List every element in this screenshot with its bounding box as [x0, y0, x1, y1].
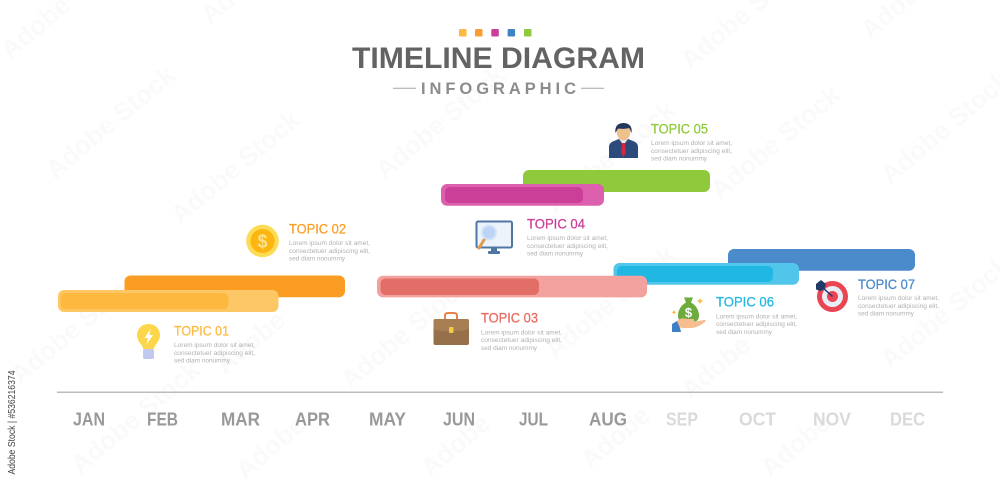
text: Adobe Stock — [540, 94, 681, 220]
topic 07 body: Lorem ipsum dolor sit amet, — [858, 295, 939, 302]
month labels: AUG — [589, 410, 627, 430]
topic 02 body: consectetuer adipiscing elit, — [289, 248, 370, 255]
month labels: FEB — [147, 410, 178, 430]
icon: dollar coin: $ — [257, 232, 268, 252]
topic 04 body: sed diam nonummy — [527, 250, 584, 258]
timeline axis — [57, 392, 943, 430]
month labels: NOV — [813, 410, 851, 430]
bar: topic 02 — [124, 276, 345, 297]
topic 07 body: sed diam nonummy — [858, 310, 915, 318]
month labels: JUN — [443, 410, 475, 430]
topic 03 heading: TOPIC 03 — [481, 310, 538, 326]
icon: businessman — [609, 123, 638, 158]
text: Adobe Stock — [705, 79, 846, 205]
text: Adobe — [755, 408, 836, 483]
text: Adobe — [415, 408, 496, 483]
text: Adobe Stock — [165, 104, 306, 230]
icon: dollar coin — [246, 225, 279, 257]
icon: dartboard — [816, 280, 848, 312]
topic 06 body: Lorem ipsum dolor sit amet, — [716, 314, 797, 320]
title block — [352, 29, 645, 98]
topic 06 body: sed diam nonummy — [716, 329, 773, 336]
topic 06 body: consectetuer adipiscing elit, — [716, 321, 797, 328]
text: Adobe Stock — [65, 354, 206, 480]
text: Adobe Stock — [540, 239, 681, 365]
month labels: DEC — [890, 410, 925, 430]
panel: topic 02 — [124, 220, 370, 297]
panel: topic 06 — [614, 263, 799, 336]
subheading: INFOGRAPHIC — [421, 80, 576, 98]
text: Adobe — [575, 400, 656, 475]
panel: topic 03 — [377, 276, 647, 352]
topic 03 body — [481, 330, 562, 352]
topic 07 heading: TOPIC 07 — [858, 276, 915, 292]
panel: topic 04 — [441, 184, 608, 258]
month labels: JAN — [73, 410, 105, 430]
topic 01 body: sed diam nonummy — [174, 358, 231, 364]
month labels — [73, 410, 925, 430]
text: Adobe — [210, 305, 291, 380]
heading: TIMELINE DIAGRAM — [352, 42, 645, 75]
topic 06 body — [716, 314, 797, 336]
topic 06 heading: TOPIC 06 — [716, 294, 774, 310]
icon: light bulb — [137, 324, 160, 359]
topic 04 body: Lorem ipsum dolor sit amet, — [527, 235, 608, 242]
month labels: MAR — [221, 410, 260, 430]
topic 05 body: Lorem ipsum dolor sit amet, — [651, 140, 732, 147]
topic 02 body: Lorem ipsum dolor sit amet, — [289, 240, 370, 247]
topic 02 body: sed diam nonummy — [289, 256, 346, 262]
panel: topic 07 — [728, 249, 939, 318]
topic 04 body — [527, 235, 608, 258]
color squares — [459, 29, 532, 36]
topic 03 body: Lorem ipsum dolor sit amet, — [481, 330, 562, 336]
bar: topic 04 — [441, 184, 604, 206]
icon: money bag on hand: $ — [685, 305, 693, 320]
text: Adobe Stock — [370, 59, 511, 185]
topic 05 heading: TOPIC 05 — [651, 120, 708, 136]
topic 02 body — [289, 240, 370, 262]
topic 02 heading: TOPIC 02 — [289, 220, 346, 236]
text: Adobe — [675, 330, 756, 405]
panel: topic 05 — [523, 120, 732, 192]
stock image credit: Adobe Stock | #536216374 — [6, 370, 18, 474]
icon: briefcase — [434, 313, 469, 345]
panel: topic 01 — [58, 290, 278, 364]
topic 04 body: consectetuer adipiscing elit, — [527, 243, 608, 250]
topic 03 body: consectetuer adipiscing elit, — [481, 337, 562, 344]
bar: topic 03 — [377, 276, 647, 297]
topic 04 heading: TOPIC 04 — [527, 215, 585, 231]
topic 03 body: sed diam nonummy — [481, 345, 538, 352]
topic 07 body: consectetuer adipiscing elit, — [858, 303, 939, 310]
month labels: JUL — [519, 410, 548, 430]
topic 05 body: consectetuer adipiscing elit, — [651, 148, 732, 155]
topic 01 heading: TOPIC 01 — [174, 322, 229, 338]
month labels: SEP — [666, 410, 698, 430]
month labels: MAY — [369, 410, 406, 430]
topic 07 body — [858, 295, 939, 318]
topic 05 body — [651, 140, 732, 162]
topic 01 body: Lorem ipsum dolor sit amet, — [174, 342, 255, 349]
month labels: OCT — [739, 410, 776, 430]
text: Adobe Stock — [5, 264, 146, 390]
bar: topic 07 — [728, 249, 915, 271]
text: Adobe Stock — [40, 59, 181, 185]
month labels: APR — [295, 410, 330, 430]
topic 01 body: consectetuer adipiscing elit, — [174, 350, 255, 357]
icon: money bag on hand — [672, 298, 706, 332]
text: Adobe — [230, 410, 311, 483]
bar: topic 01 — [58, 290, 278, 312]
bar: topic 05 — [523, 170, 710, 192]
bar: topic 06 — [614, 263, 799, 285]
icon: monitor with magnifier — [476, 222, 512, 254]
topic 05 body: sed diam nonummy — [651, 156, 708, 162]
topic 01 body — [174, 342, 255, 364]
text: Adobe Stock — [335, 269, 476, 395]
